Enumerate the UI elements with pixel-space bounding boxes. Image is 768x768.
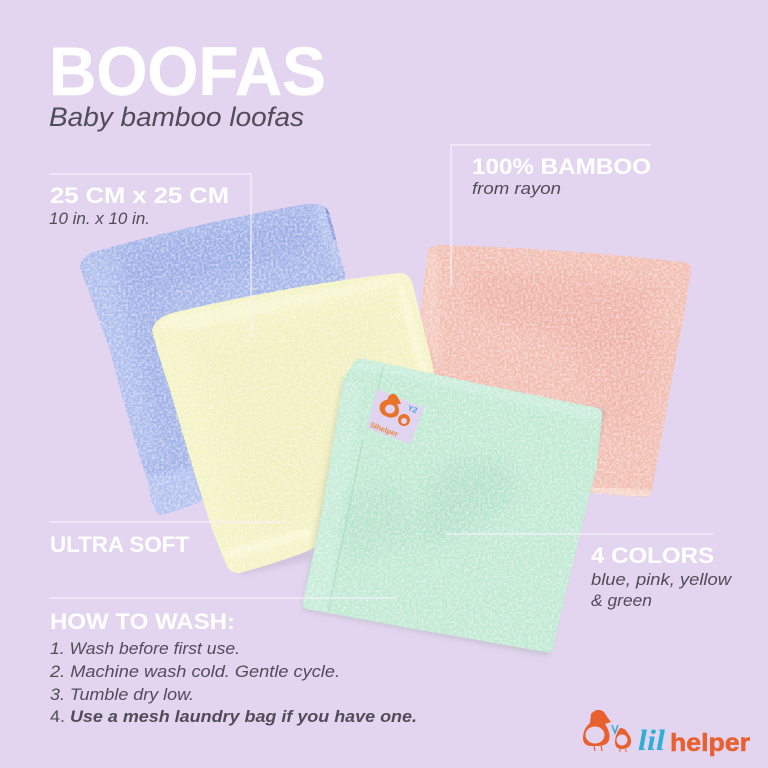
sewn label: Y2 [406, 403, 419, 415]
wash instructions [49, 609, 417, 726]
callout lines [50, 145, 713, 598]
callout: softness: ULTRA SOFT [50, 532, 190, 557]
callout: material [472, 154, 651, 198]
callout: material: 100% BAMBOO [472, 154, 651, 179]
logo wordmark: helper [670, 729, 750, 757]
towel: blue [80, 204, 345, 515]
wash steps: 4. Use a mesh laundry bag if you have one. [50, 708, 417, 726]
towel: pink [420, 245, 691, 498]
callout: size: 25 CM x 25 CM [50, 183, 229, 208]
callout: colors: 4 COLORS [591, 543, 714, 568]
icon: small bird [612, 725, 631, 752]
logo wordmark [638, 724, 750, 757]
wash heading: HOW TO WASH: [50, 609, 235, 634]
towel shadow [302, 378, 606, 656]
callout: size: 10 in. x 10 in. [49, 210, 150, 228]
callout: material: from rayon [472, 180, 561, 198]
towel: green [295, 350, 610, 660]
sewn label: lilhelper [369, 420, 399, 439]
callout: colors [591, 543, 732, 610]
callout: colors: blue, pink, yellow [591, 571, 732, 589]
wash steps: 2. Machine wash cold. Gentle cycle. [49, 663, 340, 681]
callout: colors: & green [591, 592, 652, 610]
title: BOOFAS [49, 33, 326, 110]
subtitle: Baby bamboo loofas [49, 102, 304, 132]
wash steps: 3. Tumble dry low. [50, 686, 194, 704]
sewn label [367, 389, 424, 444]
logo: lil helper [583, 710, 750, 757]
callout: size [49, 183, 229, 228]
wash steps [49, 640, 417, 726]
wash steps: 1. Wash before first use. [50, 640, 240, 658]
logo wordmark: lil [638, 724, 666, 757]
towel: yellow [145, 265, 445, 580]
icon: large bird [583, 710, 611, 751]
